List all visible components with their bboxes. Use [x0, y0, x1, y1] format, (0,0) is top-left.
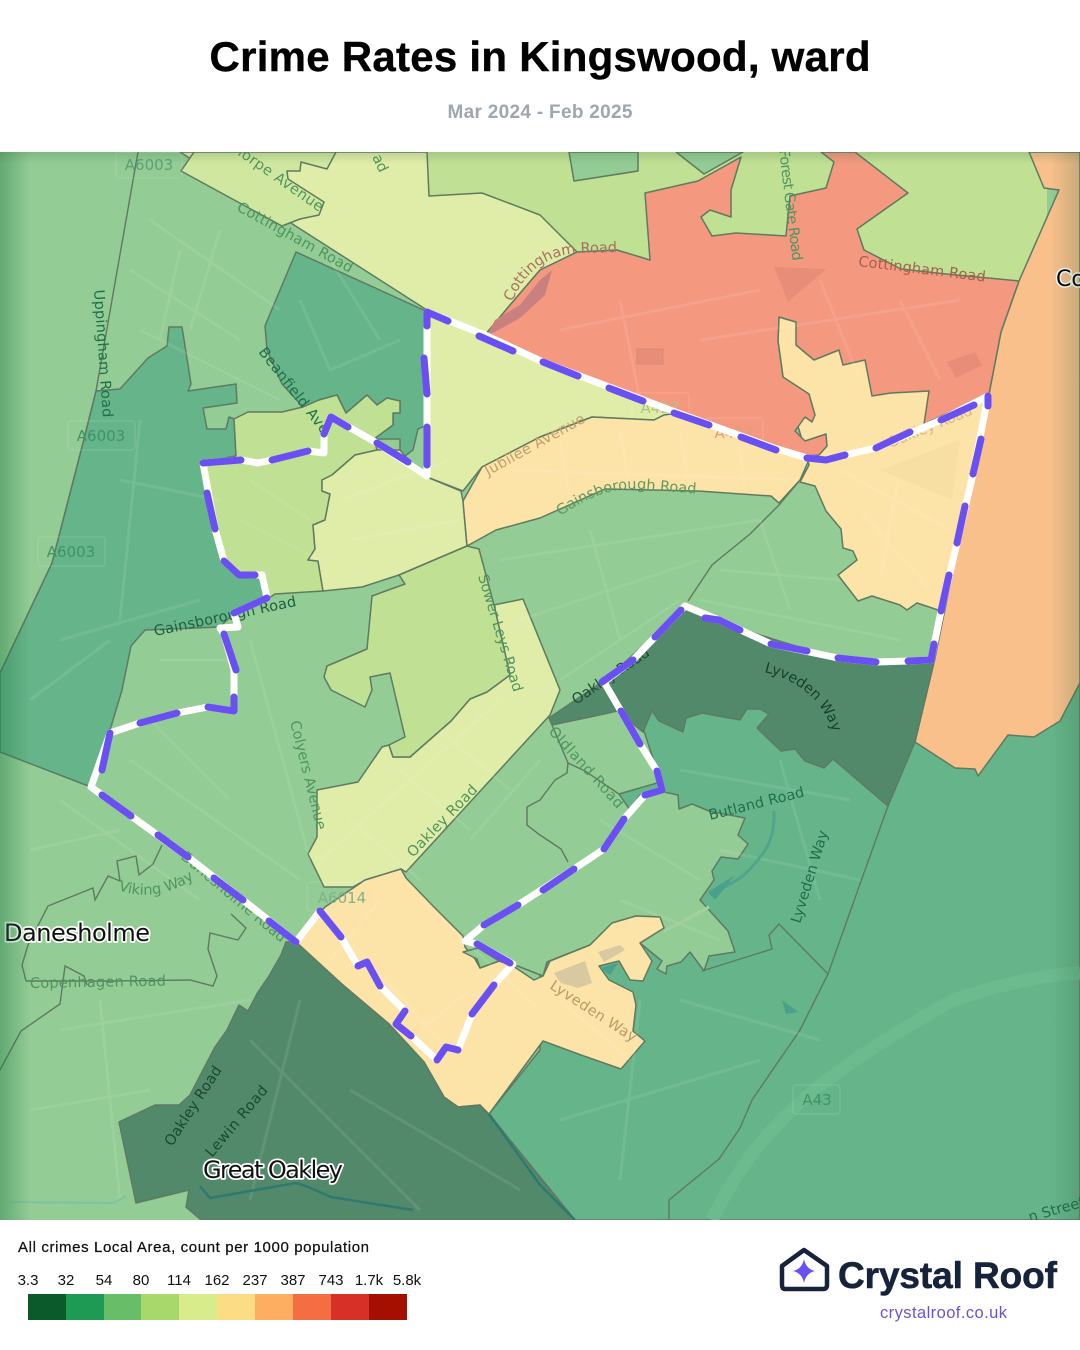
area: yellow west	[308, 450, 467, 591]
area: Thorpe Avenue	[181, 152, 336, 226]
map labels: Jubilee Avenue	[481, 411, 588, 480]
edge vignette	[0, 152, 1080, 1220]
legend values: 237	[242, 1272, 268, 1289]
title: Crime Rates in Kingswood, ward	[210, 33, 870, 80]
icon: house with star	[782, 1250, 827, 1289]
map labels: Gainsborough Road	[153, 594, 298, 640]
legend colour scale	[28, 1294, 407, 1320]
map labels: Oakley Road	[162, 1063, 225, 1149]
legend values: 162	[204, 1272, 230, 1289]
map labels: A427	[715, 424, 753, 442]
map labels: Thorpe Avenue	[222, 136, 326, 215]
map labels: Forest Gate Road	[775, 149, 805, 262]
map labels: Sower Leys Road	[474, 572, 525, 694]
subtitle: date range: Mar 2024 - Feb 2025	[448, 102, 633, 123]
region outlines	[0, 152, 888, 1220]
map labels: A6014	[318, 889, 366, 907]
wordmark: Crystal Roof	[838, 1255, 1058, 1296]
area: small green inset	[463, 948, 499, 968]
area: peach east	[915, 152, 1080, 776]
area: top green wedge	[676, 152, 743, 174]
map labels: Lyveden Way	[547, 978, 640, 1046]
map labels: A6003	[125, 156, 173, 174]
area: green sliver	[618, 782, 658, 809]
area: Beanfield green	[265, 252, 428, 456]
area: west dark-mid green	[0, 327, 269, 787]
area: top green patch	[569, 152, 638, 181]
legend values: 3.3	[18, 1272, 38, 1289]
area: pale orange east	[778, 317, 989, 611]
map labels: Lewin Road	[203, 1083, 272, 1161]
map labels: Danesholme Road	[177, 849, 289, 946]
map labels: Copenhagen Road	[30, 974, 166, 992]
map labels: Lyveden Way	[766, 662, 840, 730]
area: pale orange band	[463, 413, 808, 546]
map labels: Viking Way	[121, 872, 192, 897]
map labels: A6003	[77, 427, 125, 445]
legend title: All crimes Local Area, count per 1000 population	[18, 1239, 369, 1256]
map labels: Cottingham Road	[504, 241, 616, 300]
area: dark green Great Oakley	[119, 942, 575, 1220]
area: top light-green band	[428, 152, 1047, 280]
area: dark green Lyveden	[549, 608, 935, 806]
map labels: A43	[802, 1091, 832, 1109]
area: yellow centre strip	[308, 599, 560, 887]
water and land patches	[10, 267, 982, 1220]
road network	[30, 220, 960, 1210]
area: centre light green	[324, 546, 510, 757]
area: pale orange south	[296, 869, 664, 1114]
map labels: Oakley Road	[569, 645, 653, 708]
legend values: 114	[167, 1272, 191, 1289]
map labels: A6003	[47, 543, 95, 561]
legend values: 5.8k	[393, 1272, 422, 1289]
boundary purple dashes	[102, 312, 988, 1060]
legend values: 32	[58, 1272, 74, 1289]
map labels: Oakley Road	[404, 782, 481, 861]
legend	[18, 1239, 422, 1320]
map labels: Great Oakley	[203, 1156, 343, 1184]
map labels: A427	[641, 399, 679, 417]
map labels: Lyveden Way	[789, 828, 832, 925]
map labels: Cottingham Road	[858, 254, 987, 286]
map labels: Uppingham Road	[90, 289, 115, 418]
area: green south centre	[516, 792, 749, 976]
map labels: Beanfield Ave	[255, 345, 332, 437]
area: mid-green south-east	[489, 683, 1080, 1220]
legend values	[18, 1272, 422, 1289]
logo: Crystal Roof	[782, 1250, 1058, 1322]
map labels: Oldland Road	[545, 724, 627, 812]
map labels: ad	[368, 152, 391, 175]
legend values: 387	[280, 1272, 306, 1289]
map labels: Gainsborough Road	[556, 478, 696, 514]
road shields	[38, 152, 840, 1114]
area: west light green	[203, 395, 400, 598]
legend values: 1.7k	[355, 1272, 384, 1289]
area: red north	[485, 152, 1019, 456]
A43 road band	[712, 973, 1080, 1220]
map labels: Danesholme	[4, 919, 150, 947]
map labels: Cottingham Road	[234, 200, 356, 277]
map labels: Oakley Road	[886, 403, 975, 452]
legend values: 743	[318, 1272, 344, 1289]
legend values: 54	[96, 1272, 112, 1289]
legend values: 80	[133, 1272, 149, 1289]
map labels: Butland Road	[707, 785, 806, 824]
website: crystalroof.co.uk	[880, 1304, 1008, 1322]
boundary white underlay	[91, 312, 988, 1060]
area: yellow triangle	[427, 312, 678, 491]
area: north yellow	[180, 152, 577, 335]
map labels: Colyers Avenue	[286, 719, 329, 832]
ward boundary: Kingswood	[91, 312, 988, 1060]
